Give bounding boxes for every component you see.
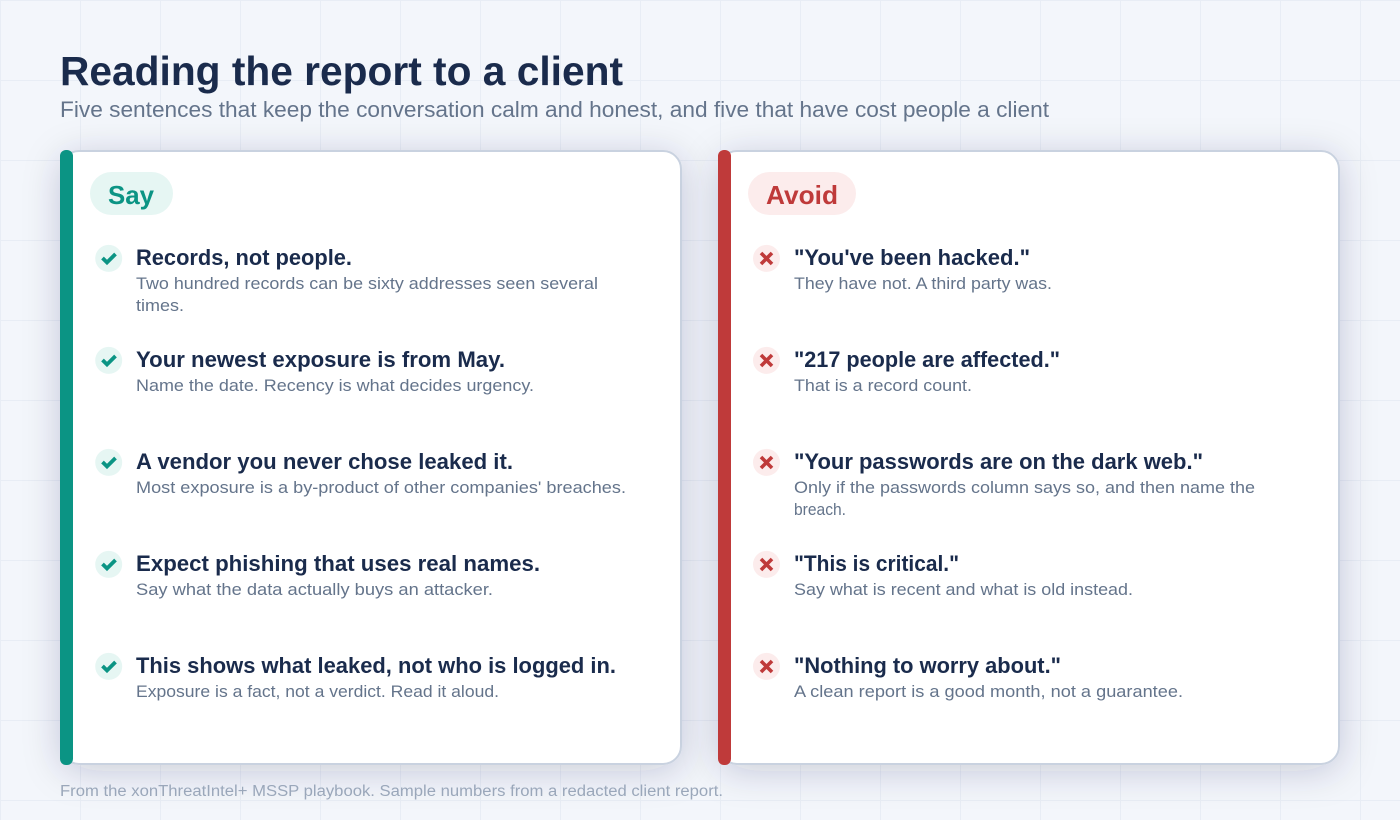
say item 3: A vendor you never chose leaked it. xyxy=(136,449,513,474)
avoid item 2: "217 people are affected." xyxy=(794,347,1060,372)
avoid badge: Avoid xyxy=(766,180,838,210)
avoid item 1 xyxy=(753,245,1052,293)
avoid item 3: Only if the passwords column says so, and then name the xyxy=(794,479,1255,497)
say item 3 xyxy=(95,449,626,497)
avoid item 5 xyxy=(753,653,1183,701)
say item 4: Say what the data actually buys an attacker. xyxy=(136,581,493,599)
avoid item 4 xyxy=(753,551,1133,599)
avoid item 4: Say what is recent and what is old instead. xyxy=(794,581,1133,599)
avoid badge xyxy=(748,172,856,215)
footer note: From the xonThreatIntel+ MSSP playbook. Sample numbers from a redacted client report. xyxy=(60,783,723,800)
title: Reading the report to a client xyxy=(60,48,623,94)
say item 2: Name the date. Recency is what decides urgency. xyxy=(136,377,534,395)
say item 5 xyxy=(95,653,616,701)
say badge xyxy=(90,172,173,215)
avoid item 3: breach. xyxy=(794,501,846,519)
panel: say xyxy=(60,150,681,765)
say item 4 xyxy=(95,551,540,599)
say item 1: times. xyxy=(136,297,184,315)
say item 1: Records, not people. xyxy=(136,245,352,270)
say item 2 xyxy=(95,347,534,395)
say item 4: Expect phishing that uses real names. xyxy=(136,551,540,576)
say item 5: This shows what leaked, not who is logged in. xyxy=(136,653,616,678)
avoid item 5: A clean report is a good month, not a guarantee. xyxy=(794,683,1183,701)
say badge: Say xyxy=(108,180,155,210)
avoid item 3 xyxy=(753,449,1255,519)
say item 1 xyxy=(95,245,598,315)
avoid item 1: "You've been hacked." xyxy=(794,245,1030,270)
subtitle: Five sentences that keep the conversation calm and honest, and five that have cost people a client xyxy=(60,97,1049,122)
say item 5: Exposure is a fact, not a verdict. Read it aloud. xyxy=(136,683,499,701)
avoid item 2 xyxy=(753,347,1060,395)
panel: avoid xyxy=(718,150,1339,765)
avoid item 5: "Nothing to worry about." xyxy=(794,653,1061,678)
say item 1: Two hundred records can be sixty addresses seen several xyxy=(136,275,598,293)
avoid item 1: They have not. A third party was. xyxy=(794,275,1052,293)
avoid item 2: That is a record count. xyxy=(794,377,972,395)
say item 2: Your newest exposure is from May. xyxy=(136,347,505,372)
avoid item 4: "This is critical." xyxy=(794,551,959,576)
avoid item 3: "Your passwords are on the dark web." xyxy=(794,449,1203,474)
say item 3: Most exposure is a by-product of other companies' breaches. xyxy=(136,479,626,497)
